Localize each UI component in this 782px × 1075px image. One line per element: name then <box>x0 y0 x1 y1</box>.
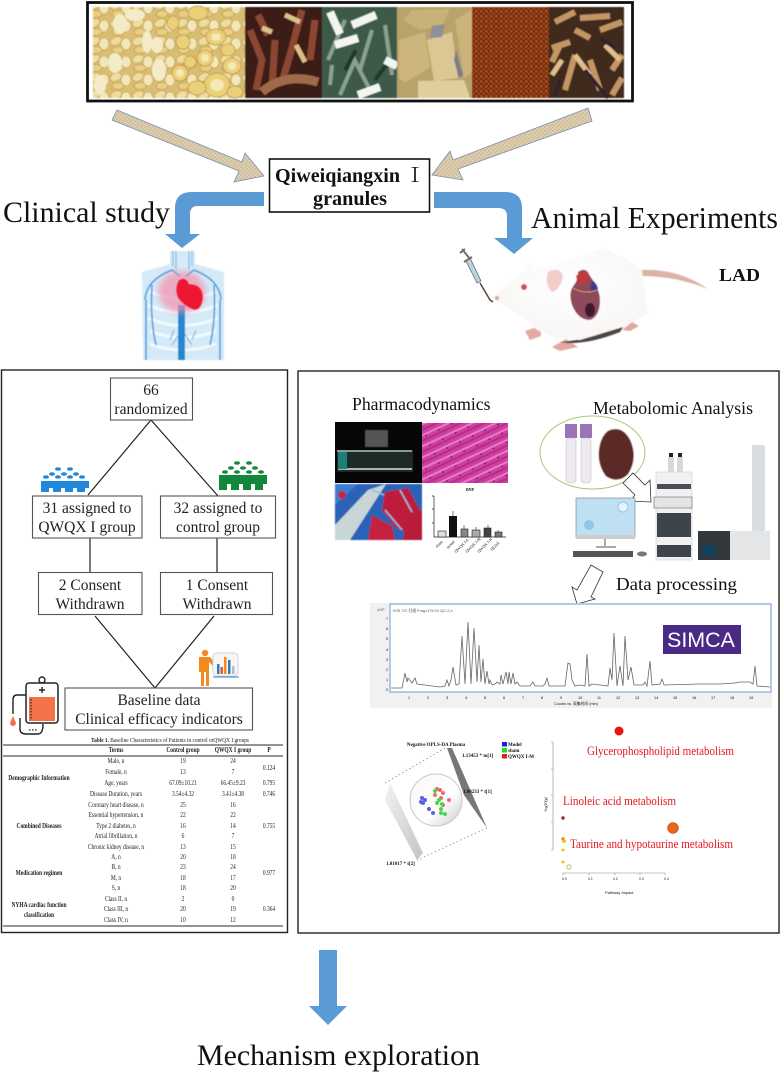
chart: pathway impact bubble plot <box>543 726 734 895</box>
icon: green patient group <box>219 461 267 490</box>
table: baseline characteristics: 13 <box>180 768 186 776</box>
chart: chromatogram: 12 <box>616 696 620 700</box>
chart: chromatogram: 11 <box>597 696 601 700</box>
table: baseline characteristics: NYHA cardiac function <box>11 901 67 909</box>
box: baseline data and clinical efficacy indicators: Clinical efficacy indicators <box>75 711 243 728</box>
illustration: human circulatory system with heart <box>142 251 224 360</box>
chart: chromatogram: 13 <box>635 696 639 700</box>
table: baseline characteristics: Essential hypertension, n <box>89 811 144 819</box>
box: 31 assigned to QWQX I group: 31 assigned to <box>43 500 132 517</box>
box: 66 randomized: 66 <box>143 382 159 399</box>
chart: chromatogram: 5 <box>386 637 388 641</box>
chart: BNP bar chart: QWQX I-L <box>453 537 470 554</box>
table: baseline characteristics: Female, n <box>105 768 127 776</box>
product box: Qiweiqiangxin I granules <box>270 159 430 212</box>
chart: BNP bar chart: sham <box>434 539 444 549</box>
product box: Qiweiqiangxin I granules: Ⅰ <box>405 159 425 188</box>
table: baseline characteristics: Medication regimen <box>16 869 63 877</box>
arrow: instruments to data <box>572 565 603 604</box>
photo: dark wood pieces <box>549 7 624 98</box>
panel: clinical study <box>2 370 288 932</box>
table: baseline characteristics: 3.41±4.38 <box>222 790 244 798</box>
chart: chromatogram: 7 <box>386 617 388 621</box>
table: baseline characteristics: Control group <box>166 746 200 754</box>
photo: red seeds <box>472 7 549 98</box>
table: baseline characteristics: 22 <box>230 811 236 819</box>
chart: BNP bar chart: model <box>445 538 456 550</box>
chart: chromatogram: 17 <box>711 696 715 700</box>
chart: chromatogram: 3 <box>386 658 388 662</box>
table: baseline characteristics: Table 1. Baseline Characteristics of Patients in control orQWQX I groups <box>91 737 249 744</box>
chart: chromatogram: 6 <box>503 696 505 700</box>
table: baseline characteristics: 13 <box>180 843 186 851</box>
table: baseline characteristics: 7 <box>232 832 234 840</box>
box: 31 assigned to QWQX I group: QWQX I group <box>38 519 136 536</box>
rat ear and eye <box>547 270 563 292</box>
chart: pathway impact bubble plot: 0.0 <box>562 877 567 881</box>
arrow: left herb arrow to product <box>112 110 264 182</box>
table: baseline characteristics: Age, years <box>104 779 128 787</box>
table: baseline characteristics: 0.746 <box>263 790 275 798</box>
arrow: samples to instrument <box>623 473 651 502</box>
table: baseline characteristics: Chronic kidney disease, n <box>88 843 145 851</box>
arrow: to clinical study <box>165 192 264 248</box>
chart: chromatogram: 5 <box>484 696 486 700</box>
chart: chromatogram: Counts vs. 采集时间 (min) <box>554 701 599 706</box>
label: glycerophospholipid metabolism: Glycerophospholipid metabolism <box>587 744 734 758</box>
icon: blue patient group <box>41 467 89 492</box>
table: baseline characteristics: 14 <box>230 822 236 830</box>
chart: chromatogram: 6 <box>386 627 388 631</box>
product box: Qiweiqiangxin I granules: granules <box>313 188 387 210</box>
table: baseline characteristics: 10 <box>180 916 186 924</box>
chart: chromatogram: 8 <box>541 696 543 700</box>
box: 2 consent withdrawn: 2 Consent <box>59 577 122 594</box>
label: linoleic acid metabolism: Linoleic acid metabolism <box>563 794 676 808</box>
table: baseline characteristics: 16 <box>230 801 236 809</box>
chart: chromatogram: 18 <box>730 696 734 700</box>
icon: presenter with chart <box>199 650 239 686</box>
chart: chromatogram: 15 <box>673 696 677 700</box>
heading: Animal Experiments: Animal Experiments <box>531 200 778 235</box>
chart: pathway impact bubble plot: 0.1 <box>588 877 593 881</box>
table: baseline characteristics: QWQX I group <box>215 746 252 754</box>
chart: BNP bar chart: QLQX <box>489 540 501 552</box>
chart: BNP bar chart: QWQX I-M <box>464 536 482 554</box>
table: baseline characteristics: 20 <box>230 884 236 892</box>
table: baseline characteristics: Atrial fibrillation, n <box>95 832 138 840</box>
logo: SIMCA <box>663 625 741 654</box>
table: baseline characteristics: 23 <box>180 863 186 871</box>
box: baseline data and clinical efficacy indicators: Baseline data <box>117 692 201 709</box>
chart: OPLS-DA 3D score plot: Model <box>508 743 522 748</box>
chart: chromatogram <box>370 603 772 708</box>
chart: BNP bar chart: BNP <box>466 487 475 492</box>
chart: BNP bar chart <box>432 487 506 554</box>
chart: chromatogram: 9 <box>560 696 562 700</box>
chart: OPLS-DA 3D score plot: QWQX I-M <box>508 755 534 760</box>
chart: chromatogram: 2 <box>427 696 429 700</box>
table: baseline characteristics: Disease Duration, years <box>90 790 142 798</box>
rat tail <box>641 270 708 289</box>
box: 31 assigned to QWQX I group <box>32 496 142 538</box>
chart: chromatogram: 3 <box>446 696 448 700</box>
image: mass spectrometer <box>698 445 770 560</box>
box: 1 consent withdrawn: 1 Consent <box>186 577 249 594</box>
chart: OPLS-DA 3D score plot: Negative OPLS-DA Plasma <box>407 743 466 748</box>
box: baseline data and clinical efficacy indicators <box>65 688 252 730</box>
photo: beige slabs <box>397 7 472 98</box>
chart: pathway impact bubble plot: -log10(p) <box>543 796 548 812</box>
table: baseline characteristics: 19 <box>230 905 236 913</box>
chart: chromatogram: 10 <box>578 696 582 700</box>
box: 32 assigned to control group: 32 assigned to <box>174 500 263 517</box>
heading: Mechanism exploration: Mechanism exploration <box>197 1039 480 1072</box>
chart: chromatogram: 1 <box>408 696 410 700</box>
chart: pathway impact bubble plot: 0.2 <box>613 877 618 881</box>
arrow: down to mechanism exploration <box>309 950 347 1025</box>
label: taurine and hypotaurine metabolism: Taurine and hypotaurine metabolism <box>570 837 733 851</box>
box: 32 assigned to control group: control group <box>176 519 260 536</box>
table: baseline characteristics: 6 <box>182 832 184 840</box>
table: baseline characteristics: 67.09±10.21 <box>169 779 197 787</box>
chart: chromatogram: 4 <box>465 696 467 700</box>
image: liquid chromatography stack <box>654 453 692 560</box>
heading: Metabolomic Analysis: Metabolomic Analysis <box>593 398 753 418</box>
table: baseline characteristics: 3.54±4.32 <box>172 790 194 798</box>
table: baseline characteristics: P <box>267 746 271 754</box>
arrow: to animal experiments <box>434 192 533 254</box>
chart: pathway impact bubble plot: 0.3 <box>639 877 644 881</box>
table: baseline characteristics: classification <box>24 911 54 919</box>
image: computer <box>573 498 647 557</box>
box: 1 consent withdrawn: Withdrawn <box>182 596 252 613</box>
table: baseline characteristics: Class II, n <box>105 895 128 903</box>
chart: OPLS-DA 3D score plot: 1.00233 * t[1] <box>463 790 492 795</box>
table: baseline characteristics: 16 <box>180 822 186 830</box>
chart: chromatogram: 4 <box>386 648 388 652</box>
chart: OPLS-DA 3D score plot: 1.13453 * to[1] <box>462 754 494 759</box>
chart: chromatogram: x10⁵ <box>377 608 385 612</box>
table: baseline characteristics: Male, n <box>108 757 125 765</box>
table: baseline characteristics: 12 <box>230 916 236 924</box>
logo: SIMCA: SIMCA <box>667 629 735 652</box>
photo: sliced yellow root <box>93 6 245 98</box>
table: baseline characteristics: 18 <box>180 874 186 882</box>
table: baseline characteristics: Terms <box>109 746 124 754</box>
arrow: right herb arrow to product <box>432 108 592 180</box>
chart: pathway impact bubble plot: 0.4 <box>664 877 669 881</box>
table: baseline characteristics: 0.795 <box>263 779 275 787</box>
image: Masson stained tissue <box>335 484 422 540</box>
label: LAD: LAD <box>719 265 760 285</box>
chart: chromatogram: 0 <box>386 688 388 692</box>
table: baseline characteristics: Demographic Information <box>8 774 70 782</box>
box: 32 assigned to control group <box>160 496 276 538</box>
illustration: syringe <box>460 249 493 302</box>
table: baseline characteristics: 0.124 <box>263 764 276 772</box>
table: baseline characteristics: 20 <box>180 905 186 913</box>
table: baseline characteristics <box>3 737 283 926</box>
heading: Clinical study: Clinical study <box>3 196 170 229</box>
rat body <box>495 248 648 340</box>
exposed heart <box>570 270 600 320</box>
table: baseline characteristics: 24 <box>230 863 236 871</box>
chart: chromatogram: +ESI TIC 扫描 Frag=175.0V QC-2.d <box>392 608 452 613</box>
table: baseline characteristics: Class IV, n <box>104 916 129 924</box>
chart: BNP bar chart: QWQX I-H <box>476 537 493 554</box>
table: baseline characteristics: 2 <box>182 895 184 903</box>
table: baseline characteristics: 22 <box>180 811 186 819</box>
box: 66 randomized <box>110 378 192 420</box>
table: baseline characteristics: 20 <box>180 853 186 861</box>
table: baseline characteristics: 7 <box>232 768 234 776</box>
panel: animal experiments <box>298 371 779 933</box>
chart: chromatogram: 2 <box>386 668 388 672</box>
table: baseline characteristics: 18 <box>180 884 186 892</box>
photo: red-brown root <box>245 7 322 98</box>
image: echocardiogram <box>335 422 422 483</box>
chart: chromatogram: 14 <box>654 696 658 700</box>
product box: Qiweiqiangxin I granules: Qiweiqiangxin <box>275 165 400 187</box>
chart: chromatogram: 19 <box>749 696 753 700</box>
chart: OPLS-DA 3D score plot: sham <box>508 749 520 754</box>
chart: chromatogram: 1 <box>386 678 388 682</box>
table: baseline characteristics: 0.364 <box>263 905 276 913</box>
table: baseline characteristics: 19 <box>180 757 186 765</box>
flowchart <box>32 378 276 730</box>
chart: chromatogram: 7 <box>522 696 524 700</box>
illustration: white rat with heart <box>495 248 708 351</box>
heading: Pharmacodynamics: Pharmacodynamics <box>352 394 491 414</box>
box: 1 consent withdrawn <box>160 572 272 614</box>
table: baseline characteristics: B, n <box>111 863 121 871</box>
table: baseline characteristics: 0 <box>232 895 234 903</box>
chart: pathway impact bubble plot: Pathway Impact <box>605 890 634 895</box>
image: HE stained tissue <box>422 423 508 483</box>
table: baseline characteristics: 0.755 <box>263 822 275 830</box>
photo: green blades with white strips <box>322 7 397 98</box>
panel: herbal ingredients photo strip <box>88 2 632 101</box>
table: baseline characteristics: S, n <box>112 884 121 892</box>
table: baseline characteristics: 24 <box>230 757 236 765</box>
table: baseline characteristics: 25 <box>180 801 186 809</box>
table: baseline characteristics: Class III, n <box>104 905 129 913</box>
table: baseline characteristics: 18 <box>230 853 236 861</box>
heading: Data processing: Data processing <box>616 574 737 594</box>
chart: chromatogram: 16 <box>692 696 696 700</box>
table: baseline characteristics: M, n <box>111 874 122 882</box>
table: baseline characteristics: 66.45±9.23 <box>221 779 245 787</box>
table: baseline characteristics: Type 2 diabetes, n <box>96 822 137 830</box>
box: 2 consent withdrawn: Withdrawn <box>55 596 125 613</box>
box: 2 consent withdrawn <box>38 572 142 614</box>
box: 66 randomized: randomized <box>114 401 188 418</box>
icon: infusion bag <box>10 677 58 734</box>
table: baseline characteristics: Combined Diseases <box>17 822 62 830</box>
chart: OPLS-DA 3D score plot: 1.01017 * t[2] <box>386 862 415 867</box>
table: baseline characteristics: A, n <box>111 853 121 861</box>
callout: samples ellipse with tubes and heart <box>540 416 645 489</box>
table: baseline characteristics: 15 <box>230 843 236 851</box>
chart: OPLS-DA 3D score plot <box>385 742 534 867</box>
table: baseline characteristics: Coronary heart disease, n <box>88 801 144 809</box>
table: baseline characteristics: 0.977 <box>263 869 275 877</box>
rat paws and shadow <box>525 322 639 351</box>
table: baseline characteristics: 17 <box>230 874 236 882</box>
